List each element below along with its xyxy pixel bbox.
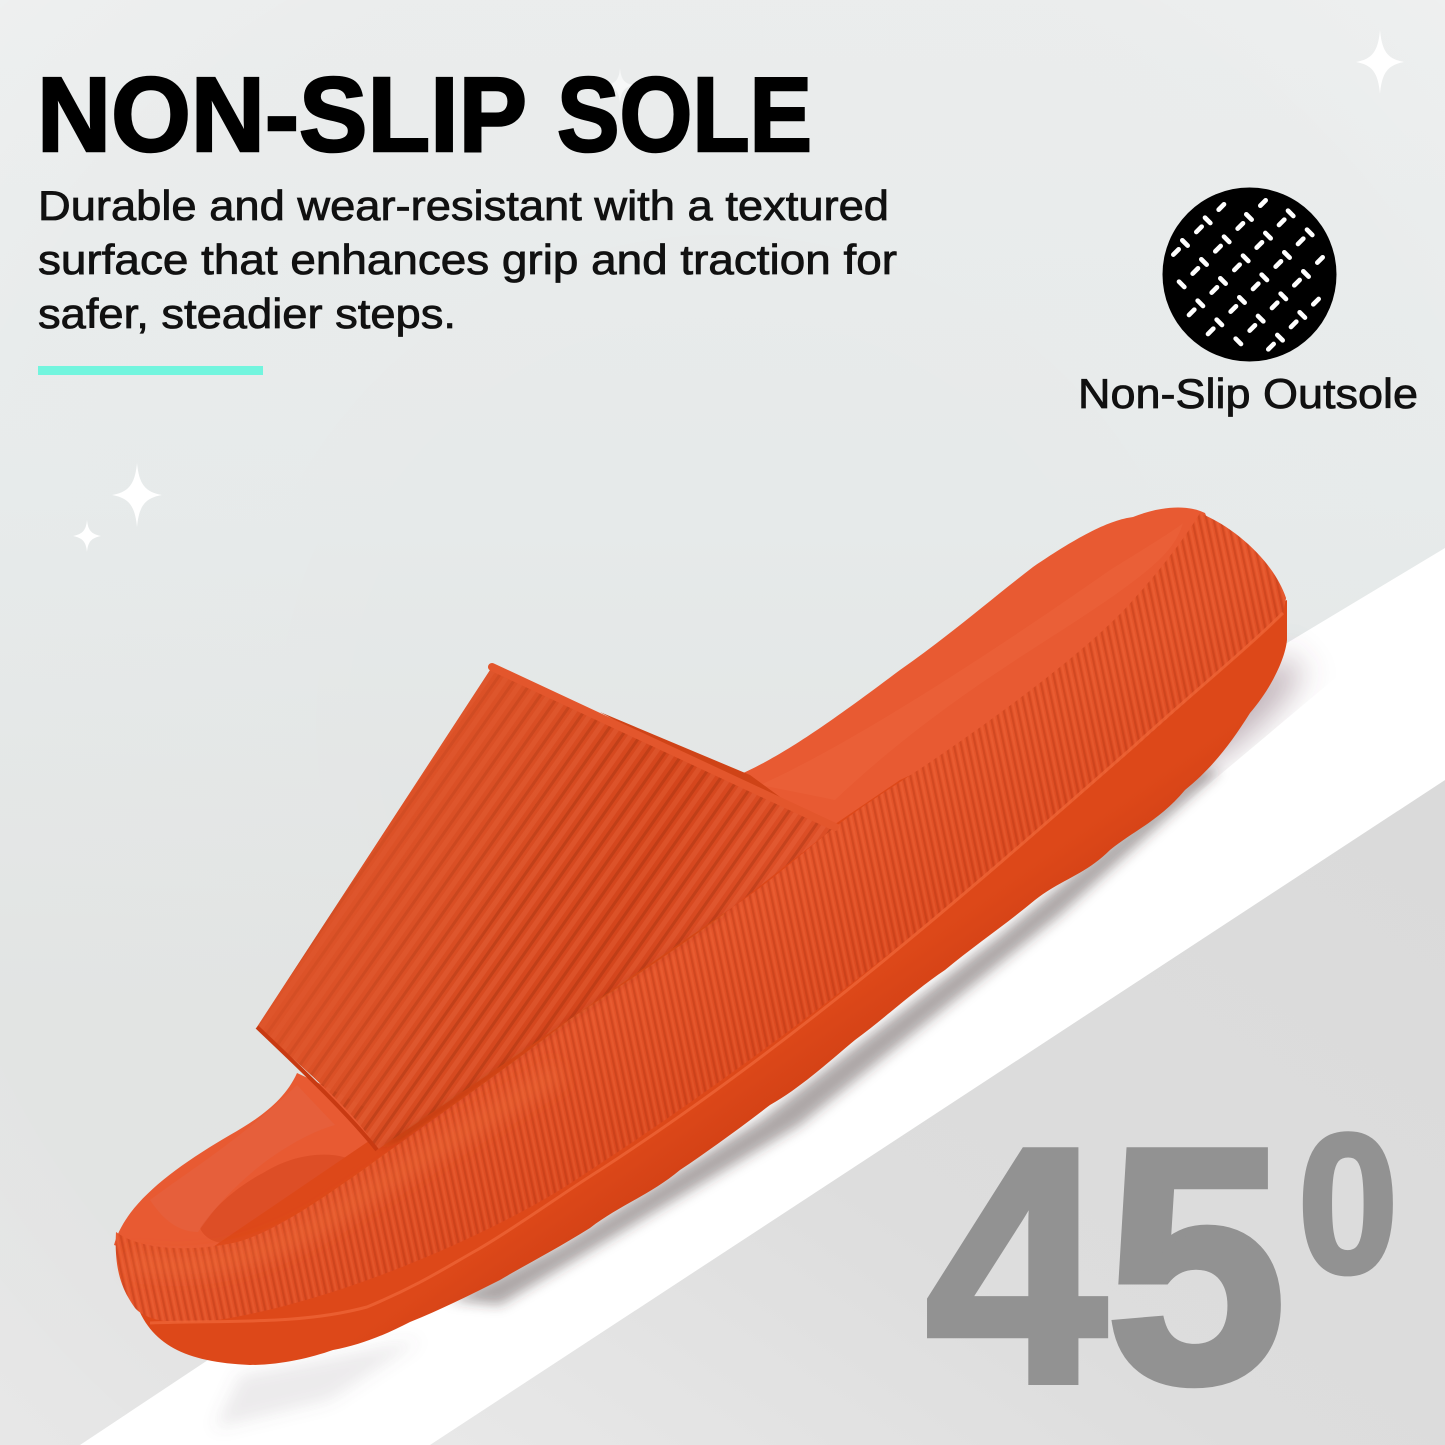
toe wall highlight — [130, 1072, 560, 1266]
description text — [38, 182, 897, 337]
sparkle left large — [112, 463, 162, 527]
toe rim shade — [150, 1085, 335, 1232]
insole recess — [760, 523, 1183, 800]
sparkle left small — [73, 520, 101, 552]
icon: non-slip outsole tread — [1162, 188, 1336, 362]
heading — [37, 56, 812, 174]
strap top edge — [492, 667, 835, 827]
heading: NON-SLIP — [37, 56, 527, 174]
side wall — [116, 513, 1286, 1322]
insole and rim — [114, 507, 1240, 1290]
toe recess — [200, 1155, 362, 1243]
heading: SOLE — [557, 56, 812, 174]
strap inner lining — [600, 712, 795, 808]
midsole and tread — [135, 600, 1287, 1365]
strap front edge — [257, 1027, 377, 1150]
sparkle faint top — [606, 68, 634, 103]
strap shadow at sole — [377, 827, 835, 1150]
icon label: Non-Slip Outsole — [1078, 370, 1418, 417]
slipper — [100, 500, 1300, 1365]
description text: safer, steadier steps. — [38, 290, 456, 337]
description text: surface that enhances grip and traction for — [38, 236, 897, 283]
angle figure: 45 — [926, 1079, 1286, 1445]
sparkle top right — [1356, 30, 1404, 94]
strap woven left panel — [257, 670, 542, 1092]
angle figure: 0 — [1298, 1093, 1398, 1314]
strap — [240, 650, 850, 1160]
description text: Durable and wear-resistant with a textured — [38, 182, 889, 229]
groove line — [150, 613, 1283, 1323]
accent bar — [38, 366, 263, 375]
